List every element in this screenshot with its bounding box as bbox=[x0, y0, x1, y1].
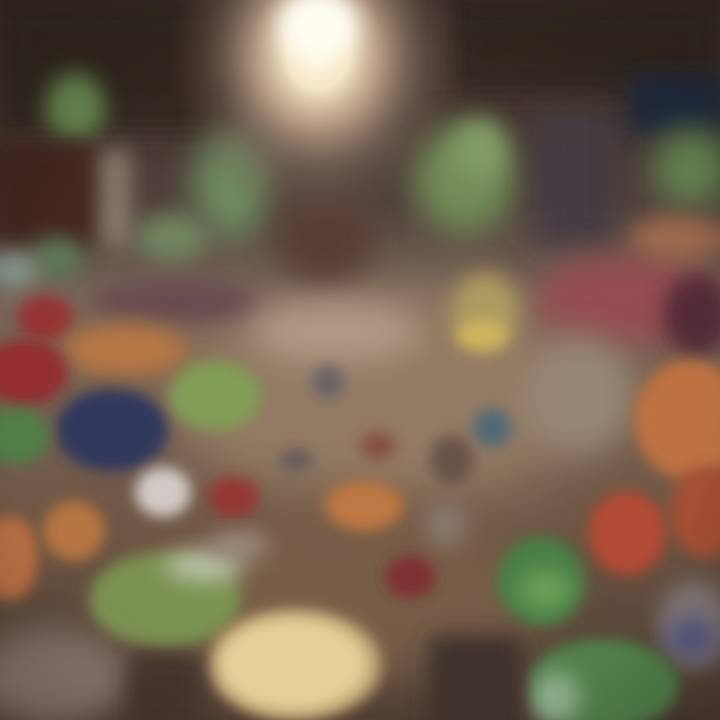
lower right tomatoes and green vegetables bbox=[498, 466, 720, 720]
centre pale items on the table bbox=[250, 302, 474, 485]
middle band of produce, left bbox=[0, 282, 261, 471]
lower small fruits bbox=[0, 467, 466, 600]
foreground: lime, lemon slice, dark jar and stones bbox=[0, 533, 523, 720]
light glow at top bbox=[168, 0, 468, 225]
background greens and dark shapes bbox=[0, 72, 720, 288]
middle band of produce, right bbox=[451, 216, 720, 480]
